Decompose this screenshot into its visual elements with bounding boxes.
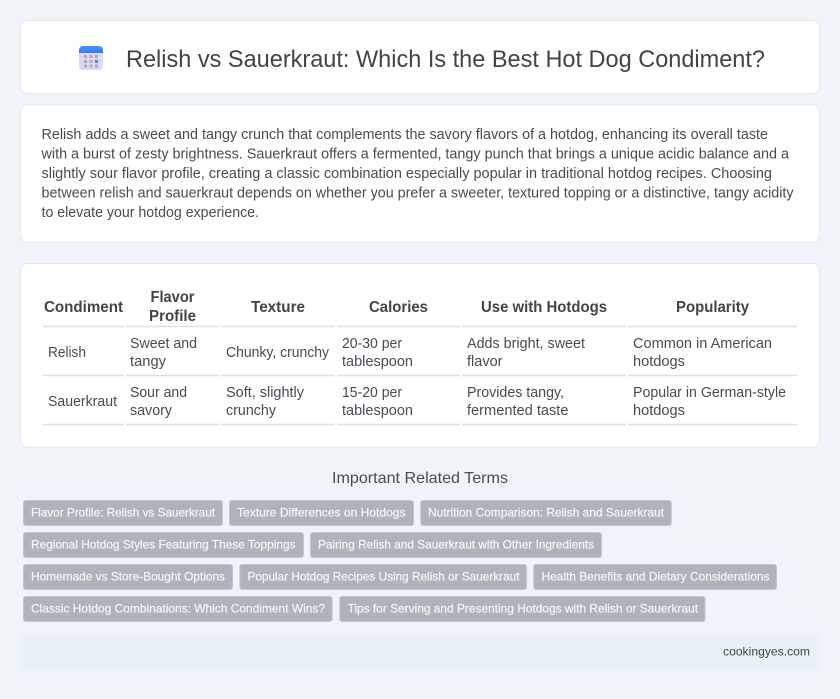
table row: relish: tangy (130, 354, 167, 370)
tag: Popular Hotdog Recipes Using Relish or Sauerkraut (248, 570, 520, 584)
table header: Calories (369, 299, 428, 316)
table row: sauerkraut: Sauerkraut (48, 394, 117, 410)
tags: related terms (24, 500, 776, 622)
footer: cookingyes.com (723, 645, 810, 659)
table row: relish (43, 336, 797, 376)
table header: Popularity (676, 299, 749, 316)
tag: Texture Differences on Hotdogs (237, 506, 406, 520)
table row: sauerkraut: 15-20 per (342, 385, 402, 401)
table row: relish: Sweet and (130, 336, 197, 352)
table row: sauerkraut: crunchy (226, 403, 277, 419)
tag: Regional Hotdog Styles Featuring These Toppings (31, 538, 296, 552)
table header: Condiment (44, 299, 124, 316)
tag: Flavor Profile: Relish vs Sauerkraut (31, 506, 216, 520)
panel: comparison table (20, 264, 820, 447)
footer (20, 635, 820, 669)
table row: sauerkraut (43, 385, 797, 424)
tag: Pairing Relish and Sauerkraut with Other Ingredients (318, 538, 594, 552)
tag (24, 564, 232, 590)
text block: intro (41, 127, 794, 221)
table header: Use with Hotdogs (481, 299, 607, 316)
text block: intro: slightly sour flavor profile, creating a classic combination especially popular in traditional hotdog recipes. Choosing (42, 166, 772, 182)
tag: Health Benefits and Dietary Considerations (542, 570, 770, 584)
table row: relish: flavor (467, 354, 503, 370)
text block: intro: with a burst of zesty brightness. Sauerkraut offers a fermented, tangy punch that brings a unique acidic balance and a (41, 146, 789, 162)
table row: sauerkraut: Sour and (130, 385, 187, 401)
table row: relish: tablespoon (342, 354, 413, 370)
table row: relish: Relish (48, 345, 86, 361)
tag: Tips for Serving and Presenting Hotdogs with Relish or Sauerkraut (348, 602, 699, 616)
table row: sauerkraut: savory (130, 403, 173, 419)
tag (24, 500, 222, 526)
tag (24, 596, 332, 622)
table row: sauerkraut: hotdogs (633, 403, 685, 419)
tag (310, 532, 602, 558)
tag: Classic Hotdog Combinations: Which Condiment Wins? (31, 602, 325, 616)
table header: Profile (149, 308, 196, 325)
tag (230, 500, 414, 526)
table row: relish: Common in American (633, 336, 772, 352)
table row: relish: 20-30 per (342, 336, 402, 352)
table row: relish: hotdogs (633, 354, 685, 370)
table row: sauerkraut: fermented taste (467, 403, 568, 419)
tag: Homemade vs Store-Bought Options (31, 570, 225, 584)
table row: sauerkraut: Popular in German-style (633, 385, 786, 401)
table row: sauerkraut: Provides tangy, (467, 385, 564, 401)
panel: intro paragraph (20, 105, 820, 242)
tag (421, 500, 671, 526)
panel: title header (20, 20, 820, 94)
table row: relish: Adds bright, sweet (467, 336, 585, 352)
tag (534, 564, 776, 590)
table header (43, 289, 797, 326)
title: Relish vs Sauerkraut: Which Is the Best Hot Dog Condiment? (126, 46, 765, 73)
heading: important related terms: Important Related Terms (332, 470, 508, 487)
table row: sauerkraut: tablespoon (342, 403, 413, 419)
table header: Texture (251, 299, 305, 316)
table header: Flavor (150, 289, 194, 306)
icon: calendar (79, 46, 103, 70)
text block: intro: to elevate your hotdog experience. (42, 205, 259, 221)
text block: intro: Relish adds a sweet and tangy crunch that complements the savory flavors of a hotdog, enhancing its overall taste (42, 127, 768, 143)
text block: intro: between relish and sauerkraut depends on whether you prefer a sweeter, textured topping or a distinctive, tangy acidity (42, 186, 794, 202)
tag (340, 596, 705, 622)
tag (24, 532, 304, 558)
tag (240, 564, 527, 590)
tag: Nutrition Comparison: Relish and Sauerkraut (428, 506, 665, 520)
table row: relish: Chunky, crunchy (226, 345, 330, 361)
table row: sauerkraut: Soft, slightly (226, 385, 305, 401)
